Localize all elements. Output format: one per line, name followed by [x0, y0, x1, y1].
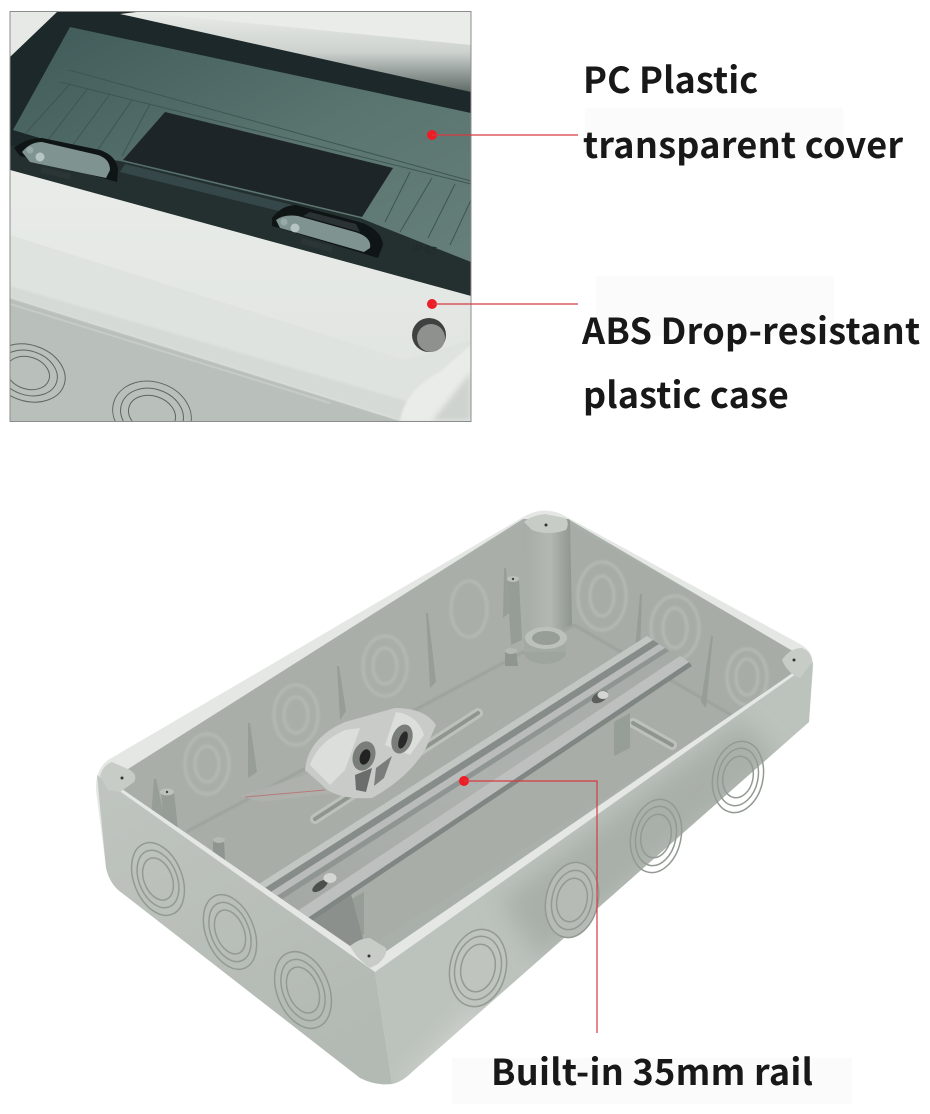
panel border — [10, 12, 471, 422]
faint label backing: case — [596, 276, 834, 336]
right latch tab — [272, 205, 383, 258]
cover lower lip — [10, 146, 471, 296]
faint label backing: cover — [585, 108, 843, 158]
case rounded corner — [400, 345, 471, 421]
cable glands in plastic bag — [240, 708, 436, 802]
case top-right surface — [130, 12, 471, 90]
right outer wall — [370, 650, 820, 1100]
faint label backing: rail — [452, 1058, 852, 1104]
box outer body and rim — [96, 510, 813, 1083]
DIN rail — [251, 636, 692, 927]
corner screw holes — [120, 524, 796, 958]
case front side wall — [10, 298, 400, 421]
opening interior — [123, 519, 792, 952]
case bevel shading — [10, 235, 471, 421]
label: rail caption: Built-in 35mm rail — [491, 1044, 813, 1096]
label: case subheading: plastic case — [583, 367, 789, 419]
rail supports — [346, 713, 630, 945]
cover upper band — [120, 12, 471, 92]
left outer wall — [90, 770, 400, 1090]
round boss — [524, 627, 567, 664]
front wall knockouts — [122, 737, 770, 1037]
case top face — [10, 170, 470, 296]
callout: rail pointer — [459, 776, 597, 1033]
corner post — [544, 519, 572, 629]
cover label strip lines — [25, 70, 471, 245]
black window — [123, 112, 393, 217]
back-left inner wall — [123, 624, 358, 822]
screw hole — [412, 318, 446, 352]
back-right inner wall — [732, 626, 792, 715]
transparent cover dark frame — [10, 12, 471, 296]
rail screws — [310, 688, 610, 894]
corner screw bosses — [100, 514, 812, 968]
left latch tab — [14, 138, 118, 182]
callout: cover pointer — [427, 130, 578, 140]
label: case heading: ABS Drop-resistant — [582, 303, 920, 355]
right knockout rings — [112, 380, 192, 421]
wall-floor shadow line — [186, 625, 733, 832]
floor — [224, 716, 730, 946]
IP rating mark: IP 65 — [411, 243, 438, 258]
inner wall faint knockouts — [185, 562, 767, 794]
label: cover heading: PC Plastic — [583, 52, 758, 104]
standoffs — [160, 576, 522, 860]
rail rear end — [309, 894, 363, 946]
callout: case pointer — [427, 299, 578, 309]
photo: open box with DIN rail — [90, 510, 820, 1100]
panel: close-up photo of cover and case — [10, 12, 470, 421]
ribs — [150, 568, 713, 830]
label: cover subheading: transparent cover — [583, 117, 903, 169]
left knockout rings — [10, 343, 66, 403]
floor slots — [315, 713, 672, 819]
cover teal window — [13, 27, 471, 268]
